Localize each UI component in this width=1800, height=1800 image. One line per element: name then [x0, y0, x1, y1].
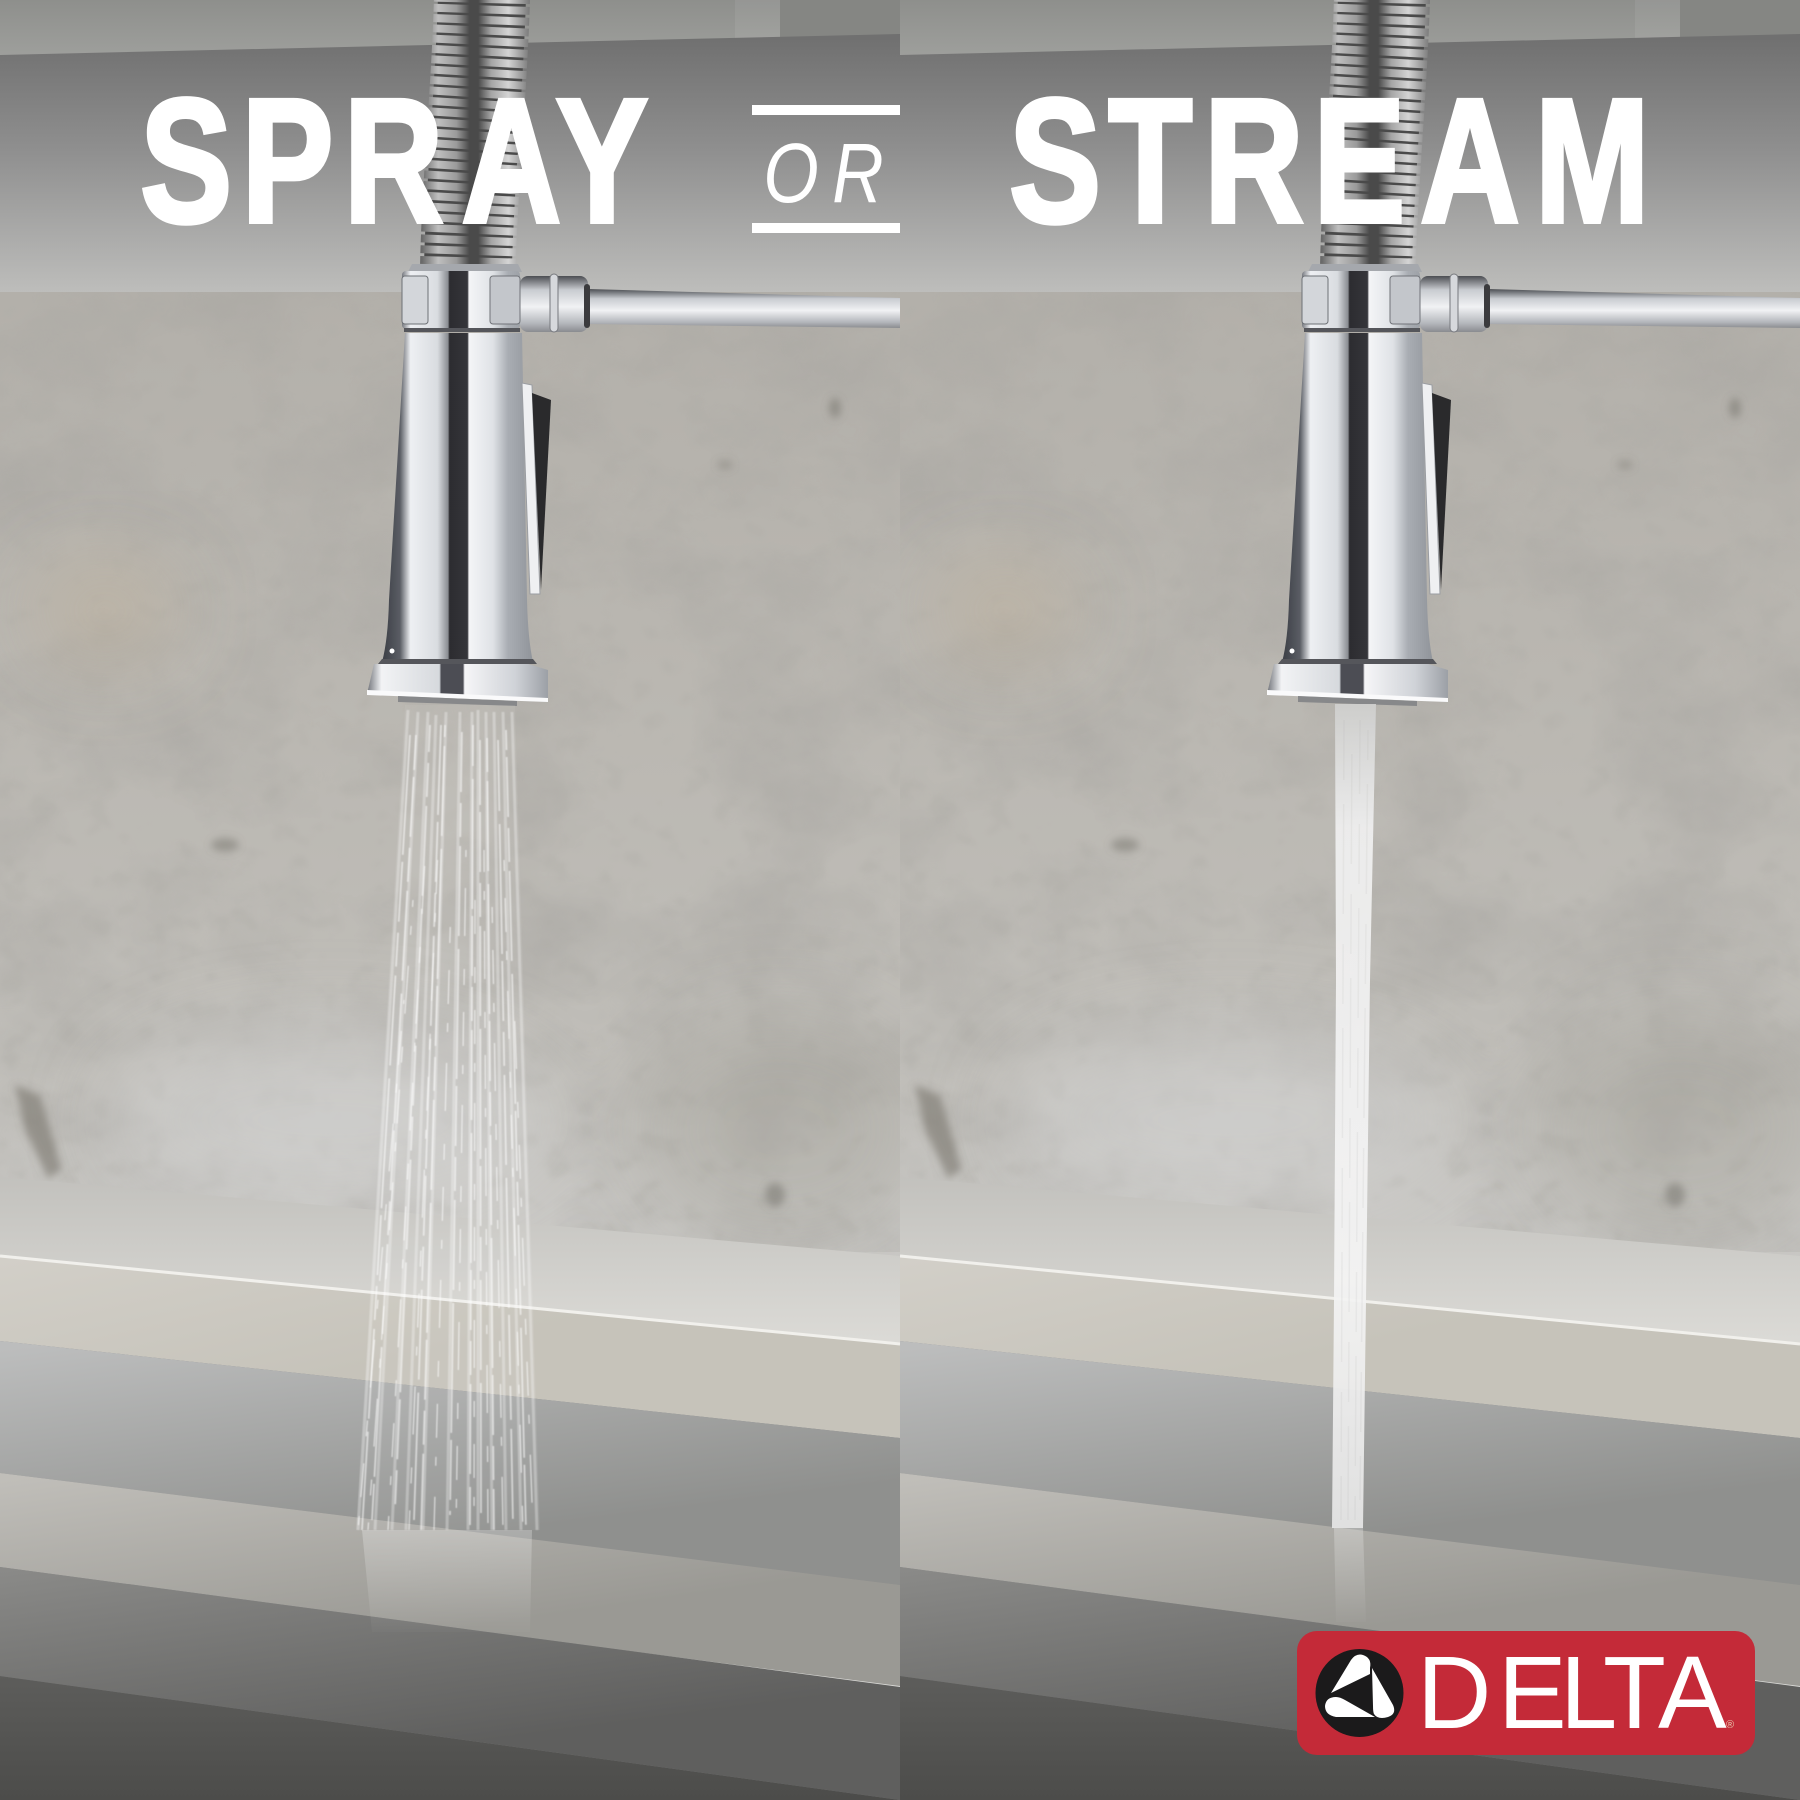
registered mark: ®: [1726, 1719, 1734, 1731]
icon: chrome faucet head with hose: [1267, 0, 1800, 706]
logo: Delta badge: [1297, 1631, 1755, 1755]
icon: chrome faucet head with hose: [367, 0, 900, 706]
icon: Delta triangle mark: [1316, 1649, 1404, 1737]
connector: OR with rules: OR: [763, 125, 884, 220]
title: STREAM: STREAM: [1009, 63, 1649, 259]
kitchen backdrop: wall, counter and sink: [0, 0, 930, 1800]
panel: stream side: [900, 0, 1800, 1800]
title: SPRAY: SPRAY: [140, 63, 648, 259]
solid water stream: [1332, 704, 1376, 1528]
wordmark: DELTA: DELTA: [1417, 1635, 1727, 1750]
kitchen backdrop: wall, counter and sink: [900, 0, 1800, 1800]
connector: OR with rules: [752, 105, 900, 233]
stream reflection in sink: [1334, 1528, 1365, 1597]
spray water jets: [356, 705, 540, 1530]
panel: spray side: [0, 0, 930, 1800]
spray reflection in sink: [362, 1530, 532, 1606]
